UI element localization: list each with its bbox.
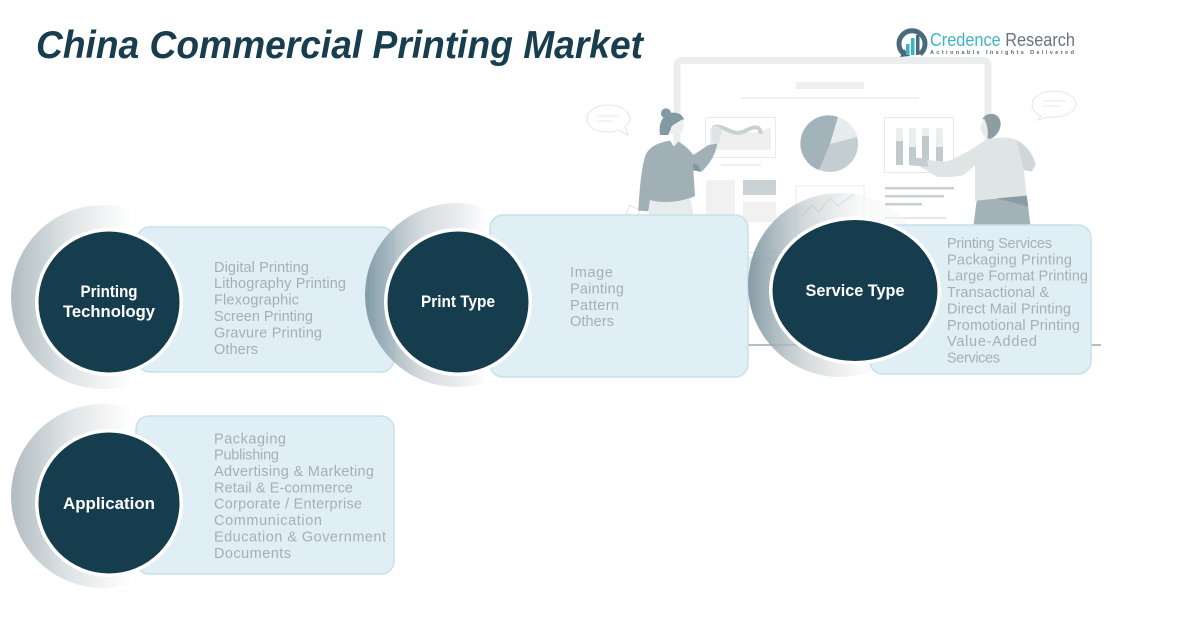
list: Packaging Printing xyxy=(947,252,1072,268)
crescent xyxy=(11,205,195,389)
circle badge xyxy=(384,228,532,376)
crescent xyxy=(748,193,932,377)
circle badge xyxy=(769,216,941,364)
list: Flexographic xyxy=(214,292,299,308)
illustration: right speech bubble xyxy=(1032,91,1076,120)
illustration: pie chart xyxy=(800,115,858,172)
content panel xyxy=(870,225,1091,374)
title: China Commercial Printing Market xyxy=(36,24,645,67)
segment: Application xyxy=(11,404,394,588)
illustration: two people presenting charts on a screen xyxy=(587,60,1076,260)
logo tagline: Actionable Insights Delivered xyxy=(930,50,1074,56)
illustration: woman presenter xyxy=(625,108,722,217)
list: Packaging xyxy=(214,432,286,448)
list: Retail & E-commerce xyxy=(214,480,353,496)
logo: Credence Research xyxy=(899,30,1075,57)
segment: Print Type xyxy=(365,203,748,387)
list: Pattern xyxy=(570,298,619,314)
background baseline xyxy=(748,252,1101,346)
list: Painting xyxy=(570,282,624,298)
content panel xyxy=(490,215,748,377)
list: Documents xyxy=(214,546,291,562)
circle badge xyxy=(35,429,183,577)
circle badge: Printing xyxy=(80,282,138,301)
list: Others xyxy=(570,314,614,330)
list xyxy=(214,432,386,562)
list xyxy=(570,265,624,330)
list: Value-Added xyxy=(947,334,1037,350)
circle badge: Application xyxy=(63,494,155,513)
list: Corporate / Enterprise xyxy=(214,496,362,512)
list: Large Format Printing xyxy=(947,268,1088,284)
list xyxy=(947,236,1088,366)
crescent xyxy=(11,404,195,588)
illustration: presentation screen xyxy=(677,60,988,260)
list: Digital Printing xyxy=(214,260,309,276)
list: Publishing xyxy=(214,448,279,464)
list: Gravure Printing xyxy=(214,326,322,342)
list: Advertising & Marketing xyxy=(214,464,374,480)
content panel xyxy=(136,416,394,574)
list: Direct Mail Printing xyxy=(947,302,1071,318)
list: Lithography Printing xyxy=(214,276,346,292)
illustration: left speech bubble xyxy=(587,105,630,135)
segment: Printing Technology xyxy=(11,205,394,389)
logo wordmark: Credence Research xyxy=(930,30,1075,50)
list: Promotional Printing xyxy=(947,318,1080,334)
circle badge: Technology xyxy=(63,302,156,321)
list: Transactional & xyxy=(947,285,1049,301)
crescent xyxy=(365,203,549,387)
list: Image xyxy=(570,265,613,281)
list: Communication xyxy=(214,513,322,529)
circle badge xyxy=(35,228,183,376)
list: Others xyxy=(214,342,258,358)
logo icon xyxy=(899,31,925,57)
circle badge: Service Type xyxy=(806,281,904,300)
list: Printing Services xyxy=(947,236,1052,252)
list: Screen Printing xyxy=(214,309,313,325)
list xyxy=(214,260,346,358)
illustration: bar chart xyxy=(896,128,943,165)
content panel xyxy=(137,227,394,372)
segment: Service Type xyxy=(748,193,1091,377)
list: Services xyxy=(947,350,1000,366)
circle badge: Print Type xyxy=(421,292,495,311)
list: Education & Government xyxy=(214,530,386,546)
illustration: man presenter xyxy=(910,114,1036,227)
